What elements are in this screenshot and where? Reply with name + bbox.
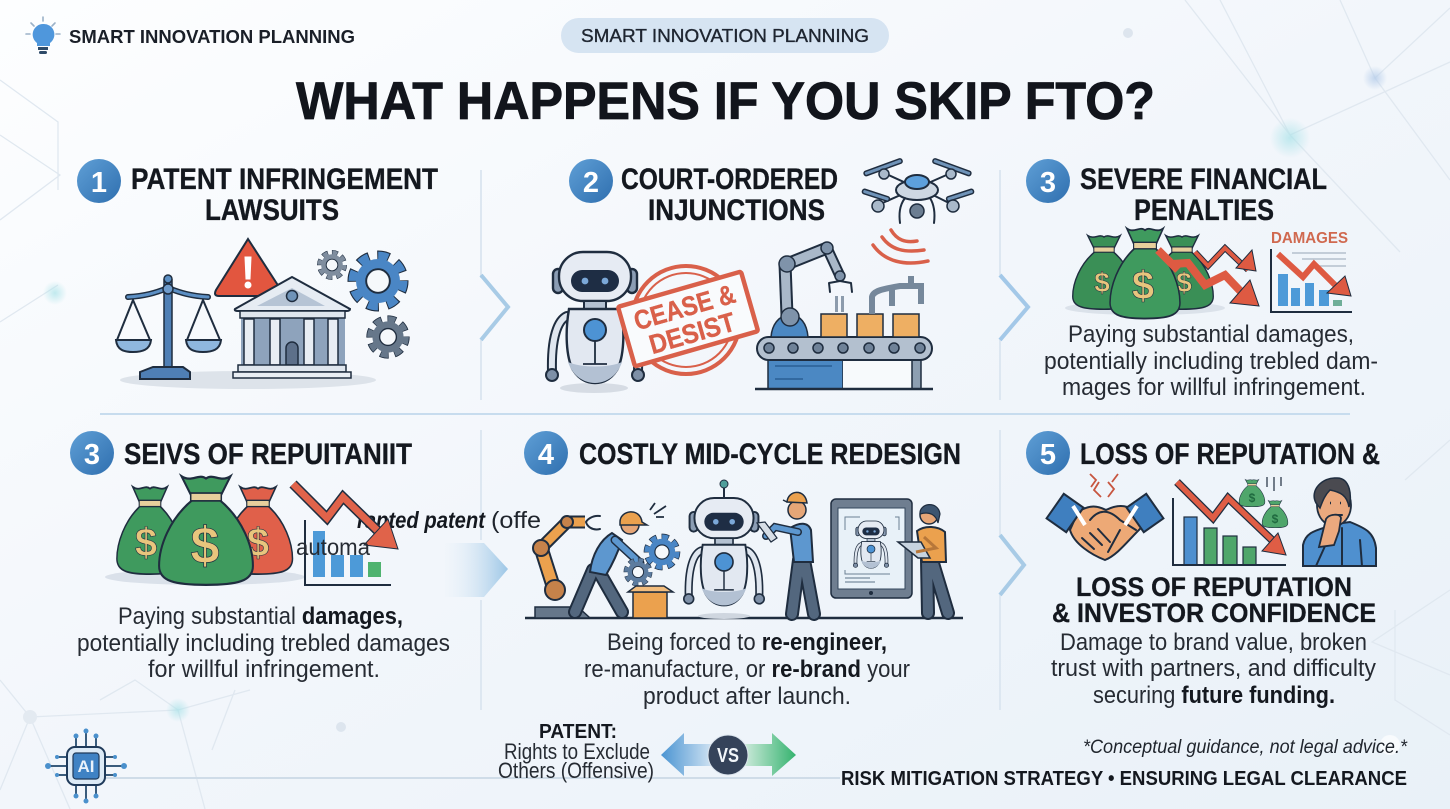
heading 2: INJUNCTIONS xyxy=(648,194,825,227)
icon: strained handshake xyxy=(1047,474,1163,560)
brand logo: light bulb with name xyxy=(26,17,355,54)
panel: seivs of repuitaniit xyxy=(70,431,541,683)
icon: AI chip xyxy=(45,728,127,804)
badge 3 xyxy=(1026,159,1070,203)
icon: scales, courthouse, warning and gears xyxy=(116,239,406,389)
icon: money bags with falling arrows xyxy=(1065,228,1259,319)
icon: cease and desist stamp: CEASE & xyxy=(631,279,739,336)
orange robot arm xyxy=(533,516,600,618)
icon: worried man xyxy=(1303,478,1376,566)
icon: cease and desist stamp: DESIST xyxy=(646,307,739,360)
badge 1 xyxy=(77,159,121,203)
badge 2 xyxy=(569,159,613,203)
icon: money bags xyxy=(105,476,305,585)
robot on floor xyxy=(684,480,764,619)
description 5: Damage to brand value, broken xyxy=(1060,629,1367,656)
header pill: SMART INNOVATION PLANNING xyxy=(581,25,869,46)
description 4: product after launch. xyxy=(643,683,851,710)
description 5: trust with partners, and difficulty xyxy=(1051,655,1376,682)
heading: loss of reputation and investor confidence: & INVESTOR CONFIDENCE xyxy=(1052,598,1376,628)
heading 1: LAWSUITS xyxy=(205,194,339,227)
icon: redesign workshop scene xyxy=(525,480,963,619)
heading 1 xyxy=(131,163,438,227)
panel: court-ordered injunctions xyxy=(546,158,974,393)
heading 5: LOSS OF REPUTATION & xyxy=(1080,438,1380,471)
description 3: mages for willful infringement. xyxy=(1062,374,1366,401)
patent rights label: PATENT: xyxy=(539,721,617,743)
description 5 xyxy=(1051,629,1376,709)
icon: damages chart xyxy=(1271,230,1352,312)
panel: costly mid-cycle redesign xyxy=(524,431,963,710)
icon: robot xyxy=(546,252,644,393)
icon: drone xyxy=(862,158,974,223)
description 3: potentially including trebled dam- xyxy=(1044,348,1378,375)
worker with tablet xyxy=(898,505,948,613)
badge 2: 2 xyxy=(583,167,599,199)
description 3: Paying substantial damages, xyxy=(1068,321,1354,348)
tablet with robot blueprint xyxy=(831,499,912,598)
icon: AI chip: AI xyxy=(78,757,94,776)
dividers and chevrons xyxy=(100,170,1350,710)
panel: severe financial penalties xyxy=(1026,159,1378,401)
heading lower 3: SEIVS OF REPUITANIIT xyxy=(124,438,412,471)
stray text: automa: automa xyxy=(296,534,370,560)
description 4: Being forced to re-engineer, xyxy=(607,629,887,656)
icon: money bags with falling arrows: $ xyxy=(1132,264,1154,308)
heading 2: COURT-ORDERED xyxy=(621,163,838,196)
badge 5 xyxy=(1026,431,1070,475)
heading 3: PENALTIES xyxy=(1134,194,1274,227)
worker with gear xyxy=(575,503,677,618)
versus arrows xyxy=(661,733,796,776)
description 3 xyxy=(1044,321,1378,401)
icon: falling bar chart xyxy=(293,484,398,585)
icon: factory conveyor with robot arms xyxy=(755,242,933,389)
description lower 3 xyxy=(77,603,450,683)
heading 1: PATENT INFRINGEMENT xyxy=(131,163,438,196)
heading 4: COSTLY MID-CYCLE REDESIGN xyxy=(579,438,961,471)
description 5: securing future funding. xyxy=(1093,682,1335,709)
badge 4: 4 xyxy=(538,439,554,471)
description 4: re-manufacture, or re-brand your xyxy=(584,656,910,683)
badge 5: 5 xyxy=(1040,439,1056,471)
header pill xyxy=(561,18,889,53)
icon: declining bar chart with bags: $ xyxy=(1272,512,1279,526)
heading: loss of reputation and investor confidence: LOSS OF REPUTATION xyxy=(1076,572,1352,602)
badge 3 lower xyxy=(70,431,114,475)
heading 3: SEVERE FINANCIAL xyxy=(1080,163,1327,196)
icon: declining bar chart with bags xyxy=(1173,477,1288,565)
brand logo: light bulb with name: SMART INNOVATION PLANNING xyxy=(69,27,355,47)
title: WHAT HAPPENS IF YOU SKIP FTO? xyxy=(296,72,1155,131)
panel: loss of reputation and investor confidence xyxy=(1026,431,1380,709)
stray text: ranted patent: ranted patent xyxy=(357,507,486,533)
icon: money bags with falling arrows: $ xyxy=(1094,267,1110,298)
bottom rule xyxy=(89,777,840,779)
badge 1: 1 xyxy=(91,167,107,199)
badge 3: 3 xyxy=(1040,167,1056,199)
icon: money bags: $ xyxy=(191,517,220,575)
icon: damages chart: DAMAGES xyxy=(1271,230,1348,247)
icon: money bags: $ xyxy=(247,521,269,565)
icon: signal arcs xyxy=(873,230,928,263)
icon: cease and desist stamp xyxy=(618,266,758,374)
description lower 3: Paying substantial damages, xyxy=(118,603,403,630)
patent rights label xyxy=(498,721,654,783)
worker with clipboard xyxy=(757,492,814,614)
description lower 3: for willful infringement. xyxy=(148,656,380,683)
icon: declining bar chart with bags: $ xyxy=(1249,491,1256,505)
heading: loss of reputation and investor confidence xyxy=(1052,572,1376,628)
footer tagline: RISK MITIGATION STRATEGY • ENSURING LEGAL CLEARANCE xyxy=(841,768,1407,790)
description lower 3: potentially including trebled damages xyxy=(77,630,450,657)
heading 3 xyxy=(1080,163,1327,227)
badge 4 xyxy=(524,431,568,475)
patent rights label: Others (Offensive) xyxy=(498,758,654,783)
icon: money bags with falling arrows: $ xyxy=(1176,267,1192,298)
versus arrows: VS xyxy=(717,745,739,767)
patent rights label: Rights to Exclude xyxy=(504,739,650,764)
panel: patent infringement lawsuits xyxy=(77,159,438,389)
icon: money bags: $ xyxy=(135,521,157,565)
badge 3 lower: 3 xyxy=(84,439,100,471)
description 4 xyxy=(584,629,910,710)
stray text: ranted patent: (offe xyxy=(491,507,541,533)
heading 2 xyxy=(621,163,838,227)
disclaimer: *Conceptual guidance, not legal advice.* xyxy=(1083,737,1408,758)
